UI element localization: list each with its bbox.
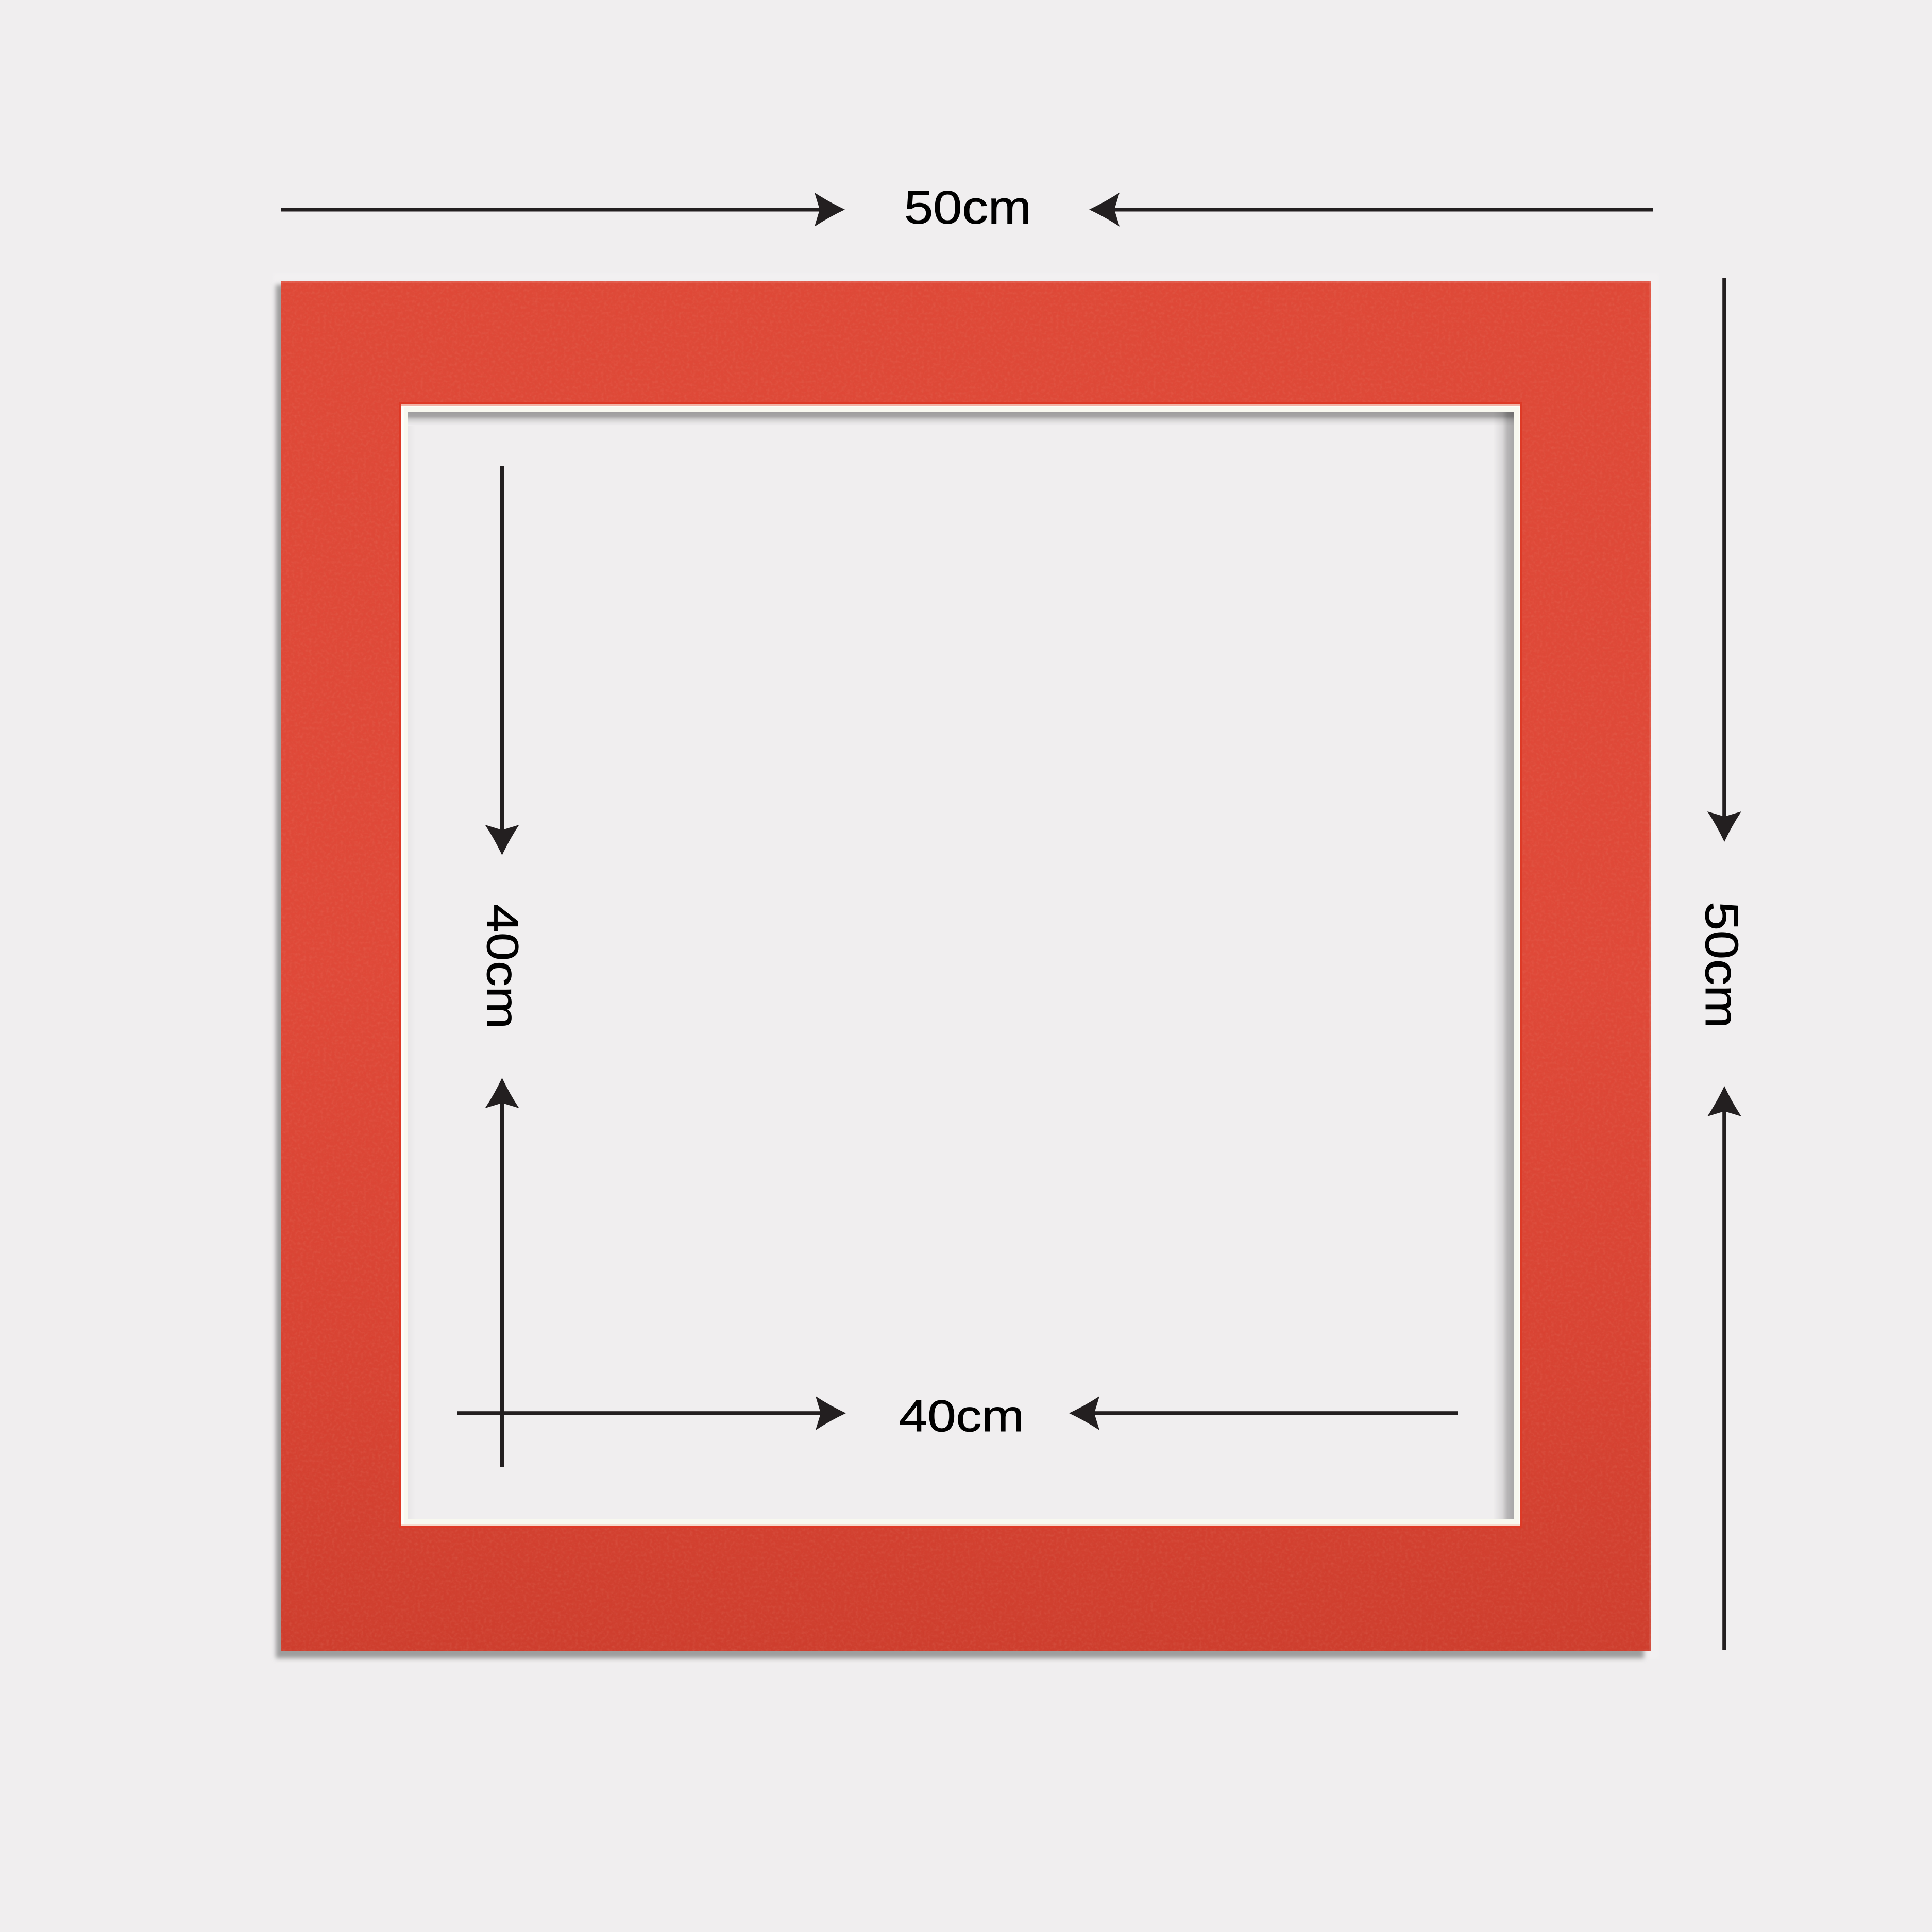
label: outer width 50cm: 50cm [904,182,1031,234]
arrow: right side pointing up [1707,1086,1741,1650]
arrow: inner bottom pointing right [457,1396,846,1430]
arrow: right side pointing down [1707,278,1741,842]
arrow: inner left pointing up [485,1078,519,1467]
panel: red mount board with square opening [273,273,1659,1659]
label: opening height 40cm: 40cm [478,904,527,1029]
inner shadow of the opening [408,412,1514,1519]
bevelled window opening [399,402,1522,1528]
arrow: inner bottom pointing left [1069,1396,1458,1430]
mount board drop shadow [273,273,1659,1659]
arrow: inner left pointing down [485,466,519,855]
label: outer height 50cm: 50cm [1696,902,1747,1028]
arrow: top right pointing left [1089,193,1653,227]
label: opening width 40cm: 40cm [899,1392,1024,1441]
arrow: top left pointing right [281,193,845,227]
mount board red surface [281,281,1651,1651]
